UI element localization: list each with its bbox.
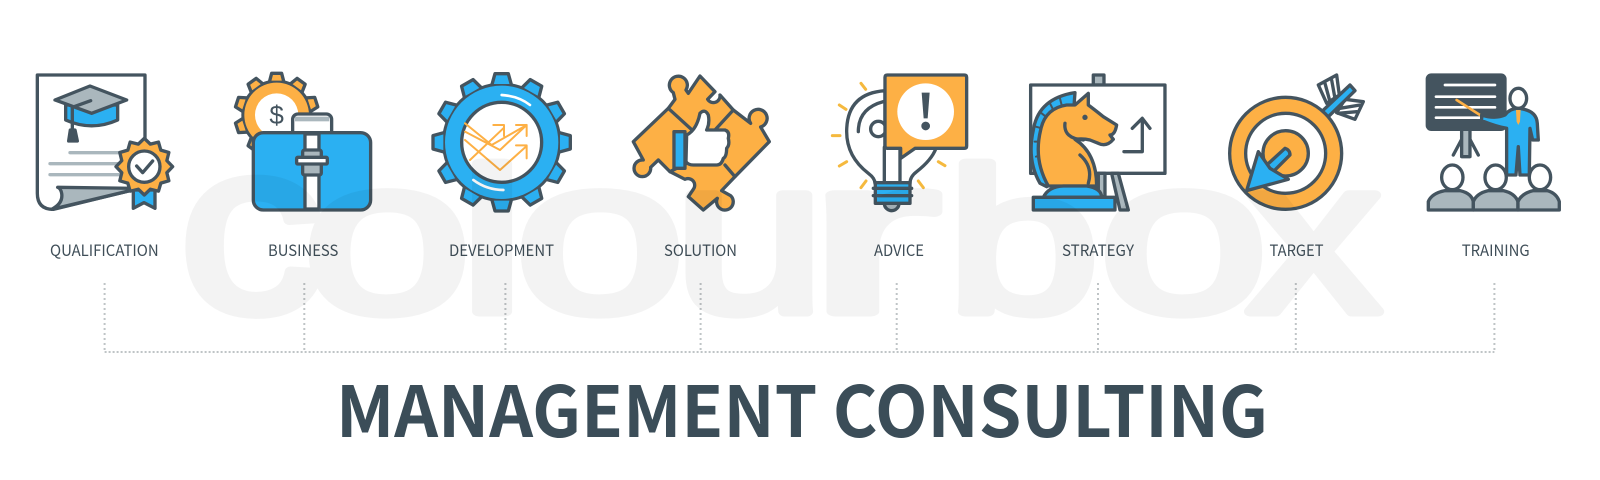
label: target: TARGET xyxy=(1270,239,1324,261)
watermark: l xyxy=(460,128,524,356)
watermark: x xyxy=(1247,112,1381,358)
icon: training presenter and audience xyxy=(1427,75,1559,210)
icon: advice light bulb and speech bubble xyxy=(832,75,967,211)
icon: development gear xyxy=(433,74,570,211)
icon: target with arrows xyxy=(1230,75,1363,209)
label: advice: ADVICE xyxy=(874,239,924,261)
watermark: o xyxy=(303,112,471,358)
icon: qualification certificate xyxy=(37,75,173,209)
icon: business gear and briefcase: $ xyxy=(269,100,284,130)
label: strategy: STRATEGY xyxy=(1062,239,1135,261)
icon: strategy chess knight and board xyxy=(1031,75,1165,210)
watermark: o xyxy=(515,112,685,358)
watermark: u xyxy=(674,112,825,358)
label: business: BUSINESS xyxy=(268,239,338,261)
label: solution: SOLUTION xyxy=(664,239,737,261)
icon: business gear and briefcase xyxy=(235,73,371,210)
label: development: DEVELOPMENT xyxy=(449,239,554,261)
watermark: r xyxy=(808,112,940,358)
watermark: c xyxy=(179,90,324,364)
label: qualification: QUALIFICATION xyxy=(50,239,159,261)
title: MANAGEMENT CONSULTING xyxy=(336,357,1268,458)
label: training: TRAINING xyxy=(1462,239,1530,261)
watermark: o xyxy=(1099,112,1268,358)
watermark xyxy=(179,90,1381,364)
watermark: b xyxy=(947,128,1099,356)
icon: solution puzzle with thumb xyxy=(633,76,769,210)
